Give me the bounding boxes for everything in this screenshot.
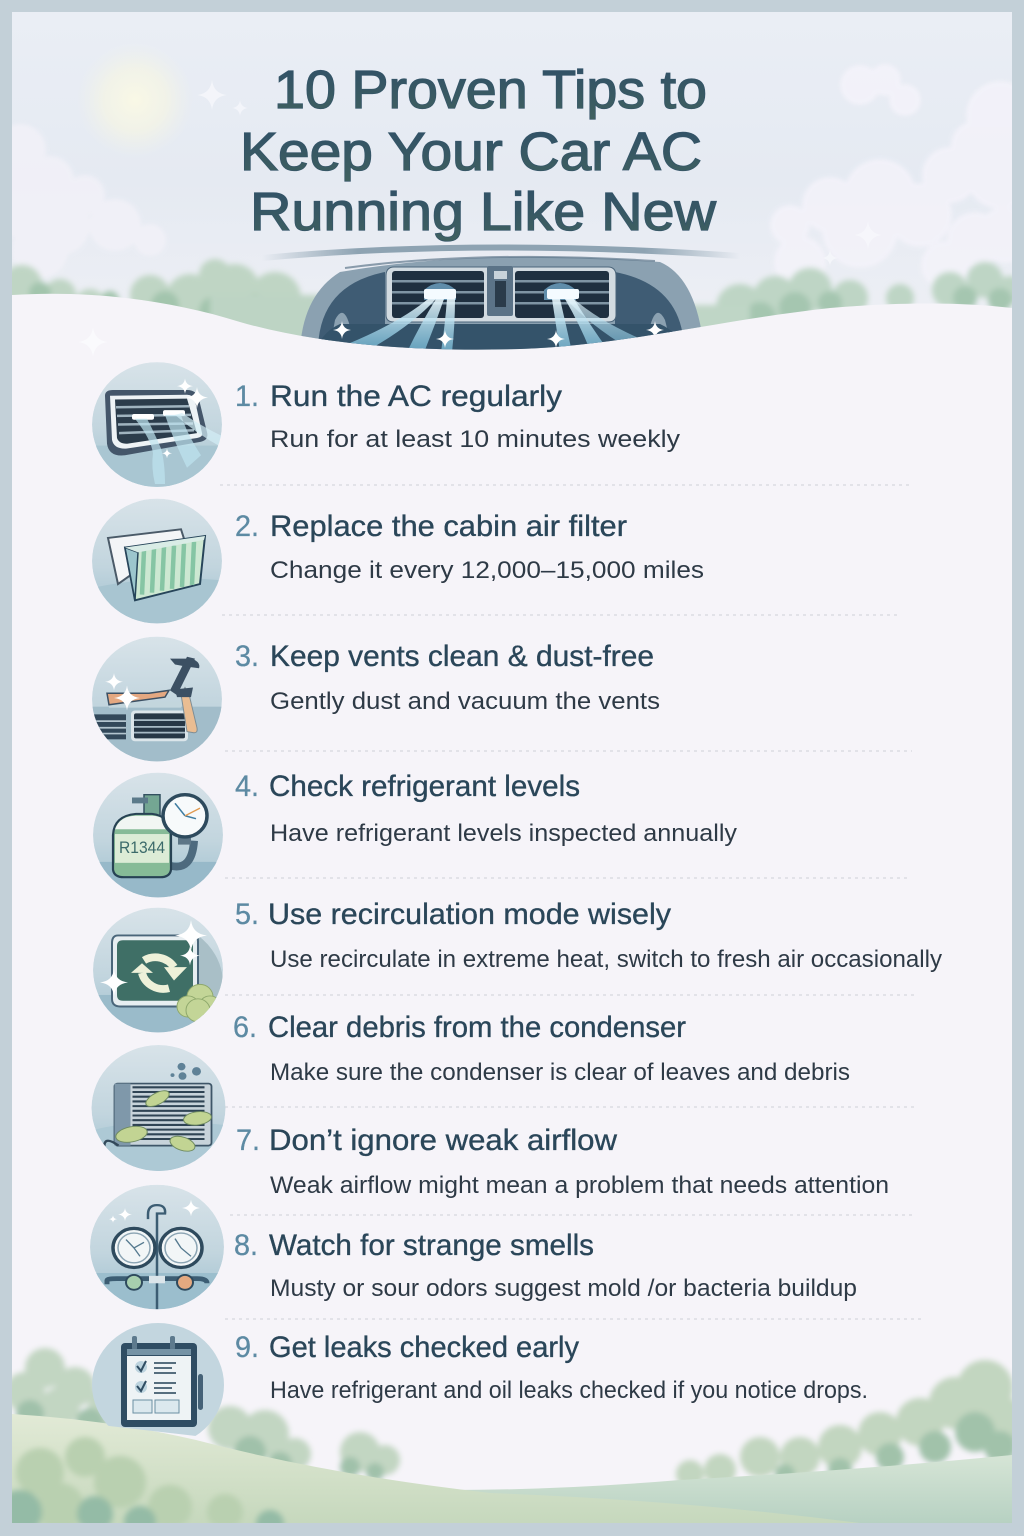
tip 1 text: 1. <box>235 380 259 413</box>
tip 1 text: Run for at least 10 minutes weekly <box>270 426 680 453</box>
tip 3 text <box>235 640 660 715</box>
clouds: left <box>12 126 162 248</box>
icon: air vent <box>92 362 222 489</box>
sun <box>98 62 172 136</box>
tip 6 text: Make sure the condenser is clear of leaves and debris <box>270 1059 850 1086</box>
icon: refrigerant can and gauge: R1344 <box>119 839 165 857</box>
tip 5 text: Use recirculate in extreme heat, switch to fresh air occasionally <box>270 946 942 973</box>
icon: inspection clipboard <box>92 1323 224 1447</box>
tip 3 text: Gently dust and vacuum the vents <box>270 688 660 715</box>
tree line: right <box>683 260 1012 330</box>
illustration: car dashboard with vent <box>262 247 740 352</box>
tip 4 text: Check refrigerant levels <box>269 770 580 803</box>
tip 9 text: Get leaks checked early <box>269 1331 579 1364</box>
sparkle on paper <box>78 327 108 357</box>
title <box>240 60 717 242</box>
clouds: right <box>770 64 1024 289</box>
sparkles <box>197 80 882 266</box>
divider lines <box>220 485 925 1319</box>
trees: right <box>676 1360 1024 1488</box>
tip 8 text: 8. <box>234 1229 258 1262</box>
tip 2 text: Replace the cabin air filter <box>270 510 627 543</box>
tip 5 text: Use recirculation mode wisely <box>268 898 671 931</box>
tip 4 <box>93 770 737 900</box>
tip 3 text: Keep vents clean & dust-free <box>270 640 654 673</box>
icon: recirculation button <box>93 908 223 1033</box>
tip 6 text <box>233 1011 850 1086</box>
icon: manifold gauges <box>90 1185 224 1310</box>
tip 4 text: 4. <box>235 770 259 803</box>
tip 3 <box>92 637 660 764</box>
hills <box>450 1455 1012 1523</box>
icon: refrigerant can and gauge <box>93 773 223 900</box>
tip 9 text: Have refrigerant and oil leaks checked if you notice drops. <box>270 1377 868 1404</box>
tip 2 <box>92 499 704 623</box>
sky scene header <box>0 12 1024 355</box>
tip 2 text: 2. <box>235 510 259 543</box>
tip 5 <box>93 898 942 1033</box>
trees: left <box>5 1348 400 1481</box>
tip 1 text <box>235 380 680 453</box>
tip 9 text <box>235 1331 868 1404</box>
tip 8 text: Musty or sour odors suggest mold /or bacteria buildup <box>270 1275 857 1302</box>
tip 9 <box>92 1323 868 1447</box>
bottom landscape <box>0 1348 1024 1536</box>
tip 6 text: 6. <box>233 1011 257 1044</box>
tree line: left <box>12 256 319 339</box>
tip 6 text: Clear debris from the condenser <box>268 1011 686 1044</box>
tip 5 text <box>235 898 942 973</box>
tip 8 <box>234 1229 857 1302</box>
tip 7 text: Weak airflow might mean a problem that needs attention <box>270 1172 889 1199</box>
tip 6 <box>92 1011 850 1171</box>
foreground foliage <box>12 1435 286 1523</box>
tip 1 text: Run the AC regularly <box>270 380 562 413</box>
title: Keep Your Car AC <box>240 122 702 182</box>
tip 9 text: 9. <box>235 1331 259 1364</box>
tip 8 text <box>234 1229 857 1302</box>
tip 5 text: 5. <box>235 898 259 931</box>
icon: vent cleaning tool <box>92 637 222 764</box>
tip 4 text <box>235 770 737 847</box>
icon: condenser with leaves <box>92 1045 226 1171</box>
tip 7 <box>90 1124 889 1310</box>
title: 10 Proven Tips to <box>274 60 707 120</box>
title: Running Like New <box>250 182 717 242</box>
tip 7 text: 7. <box>236 1124 260 1157</box>
tip 7 text <box>236 1124 889 1199</box>
tip 7 text: Don’t ignore weak airflow <box>269 1124 617 1157</box>
tip 8 text: Watch for strange smells <box>269 1229 594 1262</box>
tip 4 text: Have refrigerant levels inspected annually <box>270 820 737 847</box>
tip 1 <box>92 362 680 489</box>
icon: cabin air filter <box>92 499 222 623</box>
tip 2 text <box>235 510 704 584</box>
tip 3 text: 3. <box>235 640 259 673</box>
tip 2 text: Change it every 12,000–15,000 miles <box>270 557 704 584</box>
